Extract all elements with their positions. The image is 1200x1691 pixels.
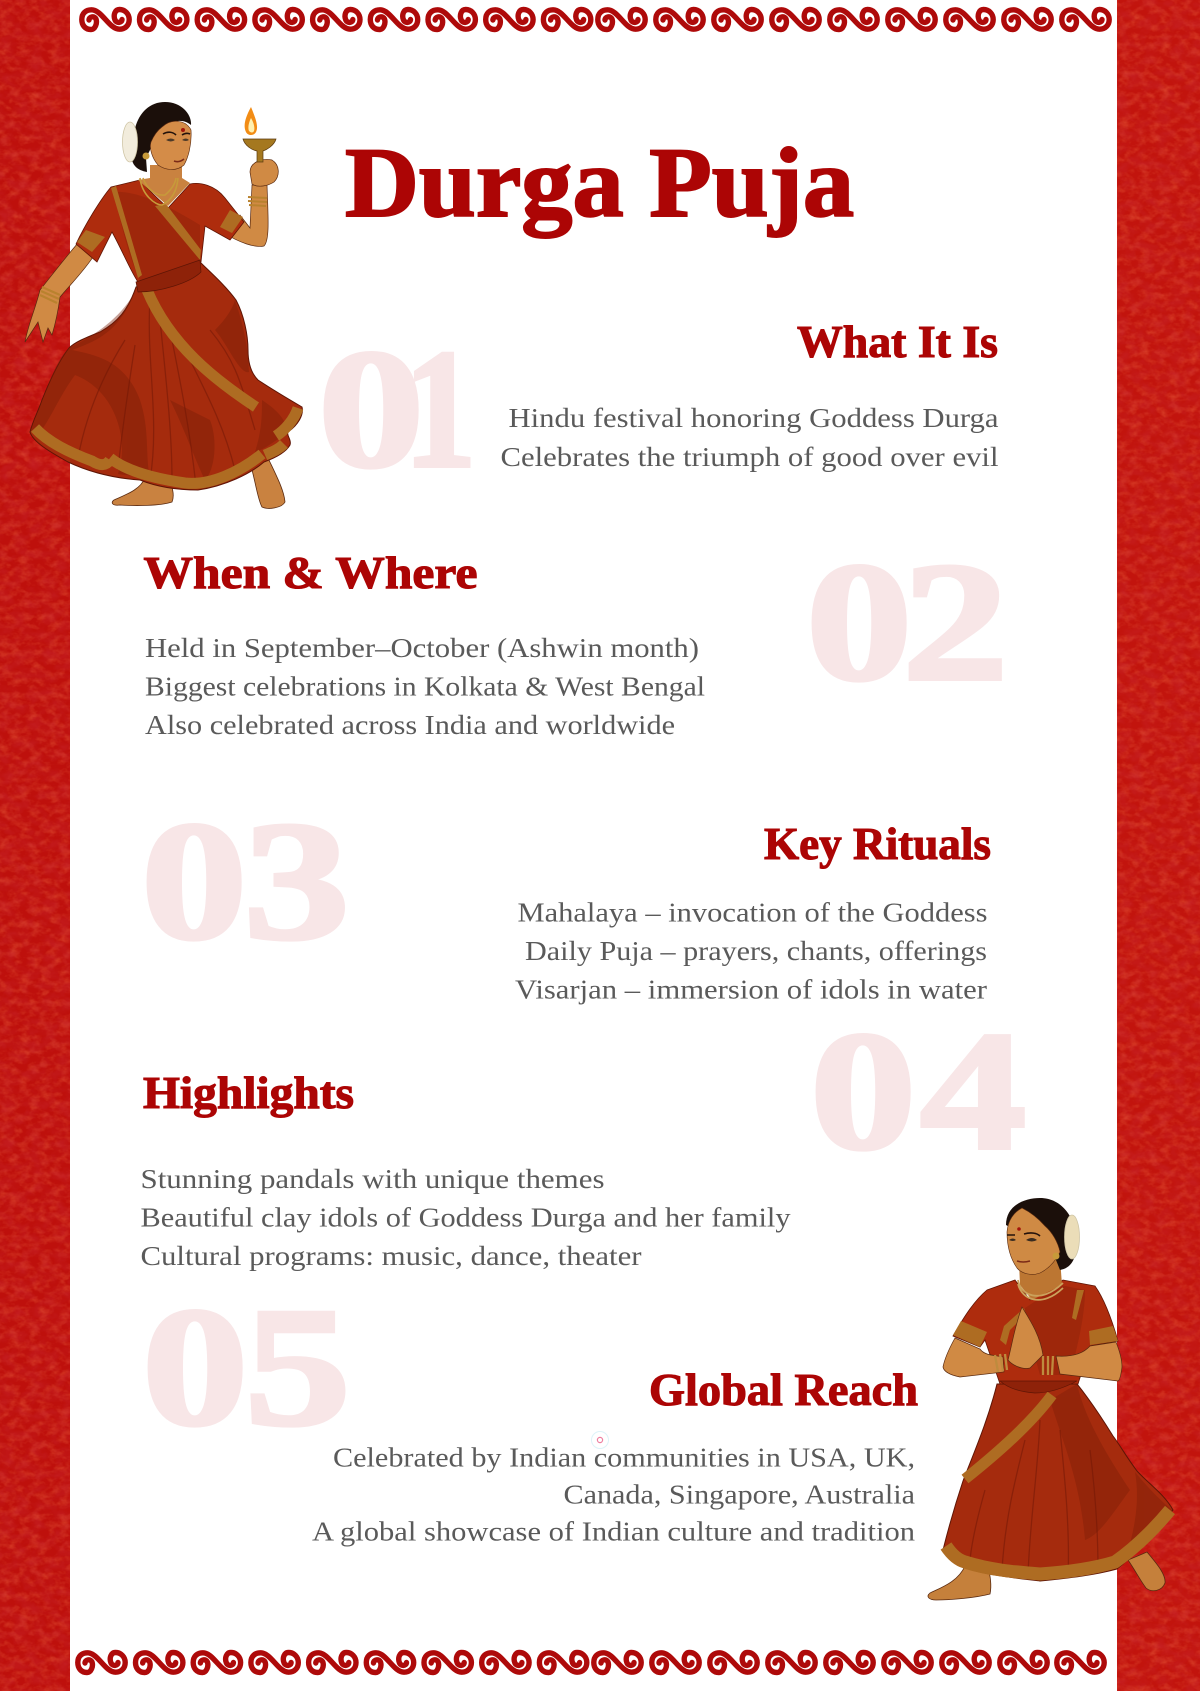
heading: Key Rituals bbox=[764, 818, 991, 869]
saree drape shade bbox=[1022, 1285, 1085, 1375]
lamp flame bbox=[245, 107, 257, 135]
hair bbox=[1006, 1198, 1076, 1270]
body text: Stunning pandals with unique themes bbox=[140, 1163, 604, 1194]
section 4: Highlights bbox=[140, 1067, 791, 1271]
skirt folds bbox=[78, 300, 255, 486]
skirt gold hem bbox=[946, 1510, 1170, 1574]
number 01 bbox=[318, 315, 476, 504]
section 5: Global Reach bbox=[312, 1364, 918, 1546]
body text: Also celebrated across India and worldwide bbox=[145, 709, 675, 740]
waist belt bbox=[136, 260, 201, 292]
necklace bbox=[140, 178, 178, 205]
hand bbox=[250, 160, 278, 186]
flowers in hair bbox=[1064, 1215, 1080, 1259]
waist belt bbox=[1000, 1381, 1077, 1393]
skirt sash bbox=[965, 1395, 1052, 1479]
number 04: 04 bbox=[810, 997, 1026, 1185]
heading: Highlights bbox=[143, 1067, 354, 1118]
body text: Celebrates the triumph of good over evil bbox=[500, 441, 999, 472]
body text: Canada, Singapore, Australia bbox=[564, 1478, 915, 1510]
face details bbox=[1007, 1227, 1060, 1262]
illustration: dancer in namaste pose bbox=[928, 1198, 1173, 1600]
right bangles bbox=[248, 197, 267, 206]
skirt shading bbox=[1050, 1384, 1172, 1560]
blouse gold trim bbox=[953, 1290, 1118, 1347]
top spiral border bbox=[82, 10, 1109, 30]
left arm bbox=[25, 243, 95, 342]
neck bbox=[1019, 1258, 1062, 1300]
panel: right red textured border bbox=[1117, 0, 1200, 1691]
number 02: 02 bbox=[806, 528, 1008, 716]
body text bbox=[145, 632, 705, 740]
bangles bbox=[995, 1354, 1053, 1375]
necklace bbox=[1018, 1280, 1063, 1300]
illustration: dancer holding lamp bbox=[25, 102, 302, 508]
left bangles bbox=[40, 287, 60, 303]
face details bbox=[142, 128, 190, 162]
body text: Visarjan – immersion of idols in water bbox=[515, 974, 987, 1004]
back foot and front foot bbox=[112, 458, 285, 508]
section 1: What It Is bbox=[500, 316, 999, 472]
hair bbox=[131, 102, 191, 172]
neck and chest bbox=[138, 165, 190, 206]
skirt folds bbox=[970, 1420, 1098, 1578]
body text: Beautiful clay idols of Goddess Durga and her family bbox=[140, 1202, 791, 1232]
title: Durga Puja bbox=[345, 127, 854, 238]
folded hands bbox=[1008, 1307, 1043, 1368]
chest shade bbox=[114, 192, 200, 280]
blouse and torso bbox=[953, 1280, 1118, 1384]
skirt bbox=[943, 1384, 1173, 1581]
body text bbox=[140, 1163, 791, 1271]
panel: left red textured border bbox=[0, 0, 70, 1691]
body text: A global showcase of Indian culture and tradition bbox=[312, 1516, 915, 1546]
right arm bbox=[222, 185, 268, 246]
number 01: 0 bbox=[318, 315, 424, 503]
body text: Mahalaya – invocation of the Goddess bbox=[518, 896, 988, 928]
skirt sash bbox=[147, 290, 256, 407]
body text: Celebrated by Indian communities in USA, UK, bbox=[333, 1442, 915, 1472]
body text: Held in September–October (Ashwin month) bbox=[145, 632, 699, 663]
right arm bbox=[1056, 1342, 1122, 1381]
number 03: 03 bbox=[141, 787, 350, 975]
body text bbox=[312, 1442, 915, 1546]
feet bbox=[928, 1552, 1165, 1600]
number 01: 1 bbox=[404, 315, 476, 504]
body text: Daily Puja – prayers, chants, offerings bbox=[525, 935, 987, 966]
flowers in hair bbox=[122, 122, 138, 162]
heading: When & Where bbox=[144, 547, 477, 598]
lamp bowl bbox=[243, 139, 276, 162]
skirt bbox=[30, 262, 302, 490]
small cursor marker bbox=[592, 1432, 608, 1448]
face bbox=[1007, 1208, 1060, 1274]
section 2: When & Where bbox=[144, 547, 705, 740]
section 3: Key Rituals bbox=[515, 818, 991, 1004]
body text bbox=[500, 402, 999, 472]
body text: Cultural programs: music, dance, theater bbox=[140, 1240, 642, 1271]
body text: Hindu festival honoring Goddess Durga bbox=[508, 402, 998, 433]
body text bbox=[515, 896, 988, 1004]
skirt gold hem bbox=[35, 408, 298, 483]
blouse gold trim bbox=[77, 186, 243, 278]
torso and blouse bbox=[76, 180, 244, 282]
left arm bbox=[943, 1338, 1004, 1377]
number 05: 05 bbox=[142, 1273, 351, 1461]
heading: Global Reach bbox=[649, 1364, 918, 1415]
body text: Biggest celebrations in Kolkata & West Bengal bbox=[145, 670, 705, 702]
face bbox=[150, 121, 191, 170]
skirt shading bbox=[30, 290, 288, 480]
heading: What It Is bbox=[797, 316, 998, 367]
bottom spiral border bbox=[78, 1652, 1104, 1672]
